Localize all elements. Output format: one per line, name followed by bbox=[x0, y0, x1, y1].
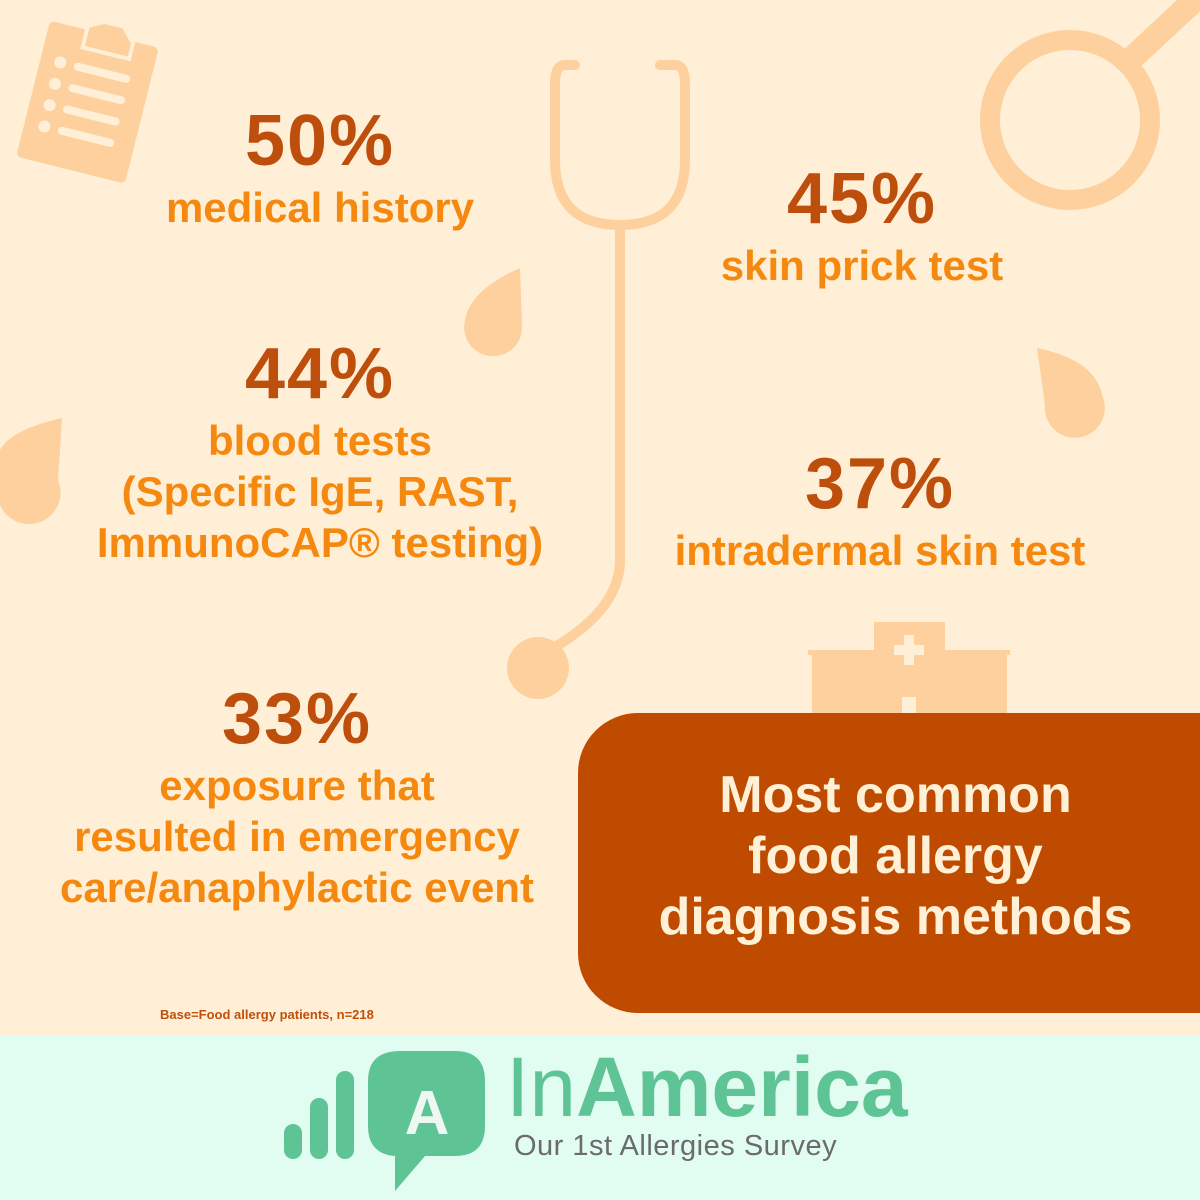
icon: drops bbox=[0, 268, 1105, 524]
panel: title: diagnosis methods bbox=[659, 888, 1132, 946]
base note: Base=Food allergy patients, n=218 bbox=[160, 1007, 374, 1022]
stat: 37% intradermal bbox=[675, 444, 1085, 574]
logo icon bbox=[284, 1051, 485, 1191]
stat: 45% skin prick test: 45% bbox=[787, 159, 937, 239]
stat: 33% exposure: care/anaphylactic event bbox=[60, 864, 534, 911]
stat: 44% blood tests: 44% bbox=[245, 334, 395, 414]
icon: stethoscope bbox=[550, 65, 685, 650]
icon: clipboard bbox=[16, 9, 162, 184]
icon: hospital bbox=[808, 622, 1010, 717]
stat: 33% exposure: resulted in emergency bbox=[74, 813, 520, 860]
stat: 37% intradermal: intradermal skin test bbox=[675, 527, 1085, 574]
logo icon: A bbox=[405, 1079, 449, 1148]
stat: 50% medical history bbox=[166, 101, 474, 231]
stat: 45% skin prick test: skin prick test bbox=[721, 242, 1003, 289]
panel: title: Most common bbox=[719, 766, 1072, 824]
footer band bbox=[0, 1036, 1200, 1200]
stat: 44% blood tests bbox=[97, 334, 543, 566]
stat: 44% blood tests: blood tests bbox=[208, 417, 432, 464]
stat: 50% medical history: 50% bbox=[245, 101, 395, 181]
footer band: Our 1st Allergies Survey bbox=[514, 1130, 837, 1162]
icon: magnifier bbox=[990, 0, 1200, 200]
stat: 33% exposure bbox=[60, 679, 534, 911]
stat: 33% exposure: 33% bbox=[222, 679, 372, 759]
stat: 37% intradermal: 37% bbox=[805, 444, 955, 524]
stat: 45% skin prick test bbox=[721, 159, 1003, 289]
stat: 44% blood tests: (Specific IgE, RAST, bbox=[122, 468, 518, 515]
panel: title: food allergy bbox=[748, 827, 1043, 885]
logo text: InAmerica bbox=[506, 1040, 908, 1134]
stat: 44% blood tests: ImmunoCAP® testing) bbox=[97, 519, 543, 566]
panel: title bbox=[578, 713, 1200, 1013]
stat: 33% exposure: exposure that bbox=[159, 762, 435, 809]
stat: 50% medical history: medical history bbox=[166, 184, 474, 231]
